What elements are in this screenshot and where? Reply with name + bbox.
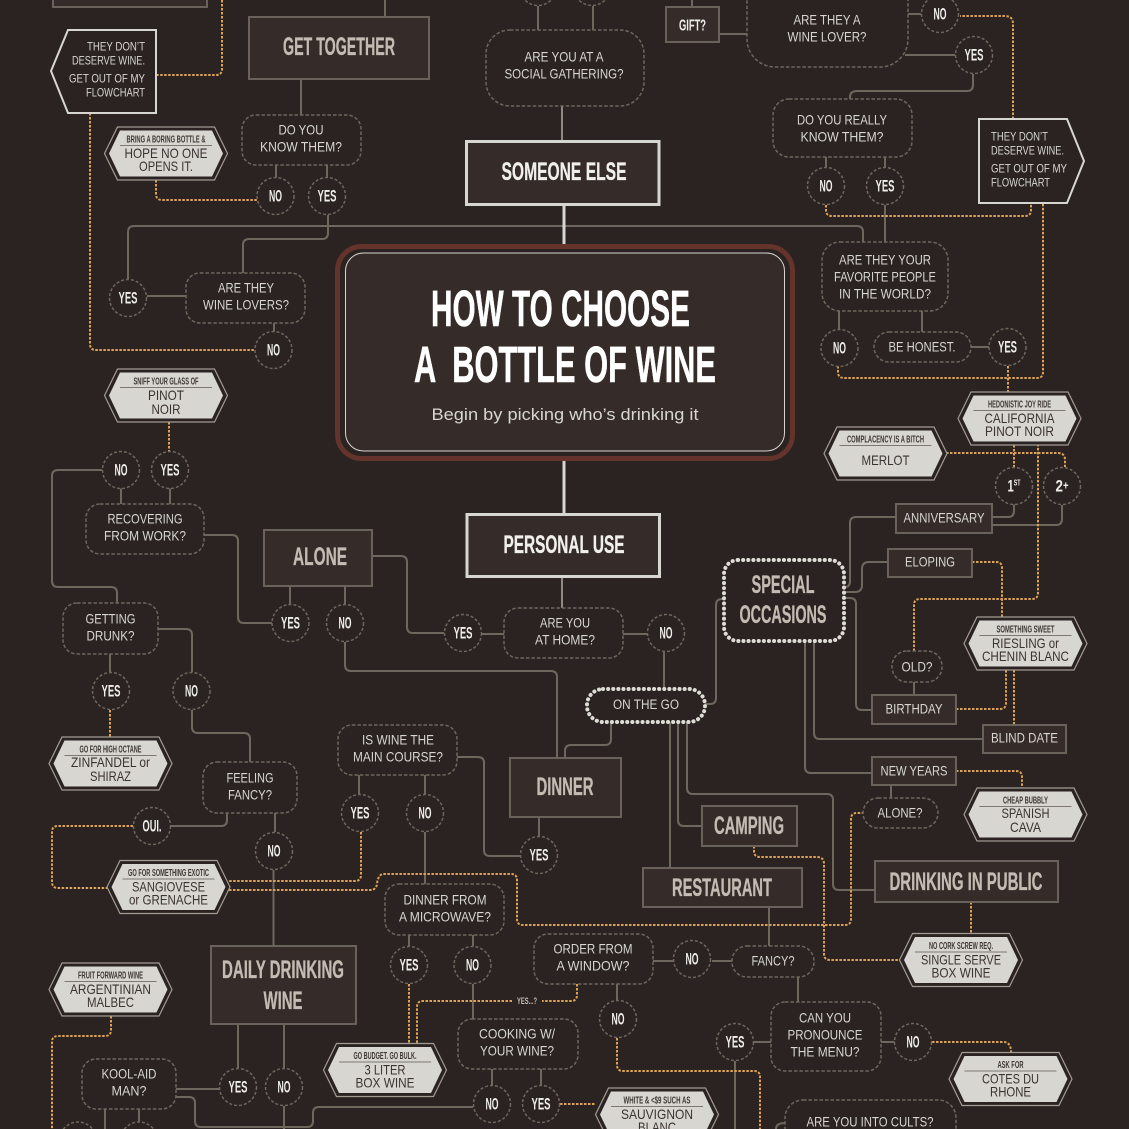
- question: are you at home: AT HOME?: [535, 632, 595, 648]
- title panel: [338, 246, 792, 458]
- category box: daily drinking wine: WINE: [264, 987, 302, 1015]
- answer: no: [600, 1000, 636, 1038]
- hub: special occasions: [724, 560, 844, 641]
- wine tag: zinfandel or shiraz: [49, 737, 172, 790]
- question: are they wine lovers: ARE THEY: [218, 280, 275, 296]
- answer: yes: [989, 328, 1026, 366]
- wine tag: sauvignon blanc: [596, 1088, 718, 1129]
- category box: alone: [264, 530, 372, 586]
- answer: no: NO: [820, 176, 832, 196]
- question: are they a wine lover: WINE LOVER?: [788, 28, 867, 44]
- question: are they your favorite people in the world: FAVORITE PEOPLE: [834, 268, 936, 284]
- answer: yes: [716, 1024, 754, 1060]
- occasion: eloping: [888, 549, 972, 577]
- wine tag: california pinot noir: [958, 392, 1081, 445]
- wine tag: cotes du rhone: ASK FOR: [998, 1059, 1024, 1071]
- answer: yes: YES: [530, 846, 548, 864]
- answer: no: NO: [686, 950, 698, 968]
- wine tag: riesling or chenin blanc: CHENIN BLANC: [982, 648, 1069, 664]
- question: dinner from a microwave: [385, 884, 504, 935]
- wine tag: zinfandel or shiraz: ZINFANDEL or: [71, 754, 150, 770]
- answer: two or more anniversaries: 2: [1056, 476, 1065, 496]
- answer: yes: [520, 836, 558, 874]
- wine tag: spanish cava: SPANISH: [1002, 805, 1050, 821]
- answer: yes: YES: [998, 338, 1017, 356]
- wine tag: spanish cava: [964, 788, 1087, 841]
- occasion: blind date: [983, 725, 1066, 753]
- answer: no: NO: [486, 1094, 498, 1114]
- answer: yes: [152, 452, 188, 488]
- wine tag: hope no one opens it: BRING A BORING BOTTLE &: [126, 134, 206, 146]
- answer: yes: YES: [318, 186, 336, 206]
- answer: two or more anniversaries: +: [1063, 478, 1068, 492]
- wine tag: 3 liter box wine: GO BUDGET. GO BULK.: [353, 1050, 417, 1062]
- answer: no: NO: [934, 4, 946, 24]
- answer: no: NO: [267, 340, 280, 360]
- wine tag: sauvignon blanc: WHITE & <$9 SUCH AS: [624, 1094, 690, 1106]
- question: are they a wine lover: [747, 0, 908, 67]
- wine tag: california pinot noir: HEDONISTIC JOY RIDE: [988, 398, 1051, 410]
- wine tag: cotes du rhone: [949, 1052, 1072, 1106]
- stop sign left: they don't deserve wine: DESERVE WINE.: [72, 56, 145, 68]
- wine tag: pinot noir: SNIFF YOUR GLASS OF: [134, 376, 199, 388]
- question: alone: ALONE?: [878, 804, 923, 820]
- answer: no: [922, 0, 958, 32]
- stop sign right: they don't deserve wine: THEY DON’T: [991, 132, 1048, 144]
- stop sign left: they don't deserve wine: THEY DON’T: [87, 42, 145, 54]
- stop sign left: they don't deserve wine: GET OUT OF MY: [69, 74, 145, 86]
- stop sign left: they don't deserve wine: FLOWCHART: [86, 88, 145, 100]
- category box: someone else: SOMEONE ELSE: [502, 158, 626, 186]
- stop sign right: they don't deserve wine: [979, 119, 1084, 203]
- answer: no: [266, 1068, 302, 1106]
- answer: no: [406, 794, 444, 832]
- answer: no: NO: [418, 804, 432, 822]
- question: are they your favorite people in the world: IN THE WORLD?: [839, 286, 931, 302]
- answer: no: NO: [268, 842, 280, 860]
- answer: oui: [134, 808, 170, 844]
- answer: two or more anniversaries: [1044, 468, 1080, 504]
- wine tag: hope no one opens it: HOPE NO ONE: [124, 145, 208, 161]
- wine tag: riesling or chenin blanc: SOMETHING SWEET: [996, 624, 1055, 636]
- category box: camping: [702, 806, 797, 846]
- wine tag: spanish cava: CAVA: [1010, 819, 1042, 835]
- hub: special occasions: OCCASIONS: [740, 601, 826, 629]
- answer: yes: YES: [160, 460, 180, 480]
- answer circle clipped at bottom: [120, 1122, 158, 1129]
- answer: yes: [342, 794, 378, 832]
- question: cooking with your wine: YOUR WINE?: [480, 1042, 554, 1058]
- question: kool-aid man: MAN?: [112, 1082, 147, 1098]
- wine tag: hope no one opens it: [104, 127, 228, 180]
- stop sign right: they don't deserve wine: DESERVE WINE.: [991, 146, 1064, 158]
- answer: yes: [866, 168, 904, 204]
- wine tag: spanish cava: CHEAP BUBBLY: [1003, 794, 1048, 806]
- category box: dinner: [510, 758, 621, 817]
- question: feeling fancy: [203, 762, 297, 813]
- question: order from a window: ORDER FROM: [554, 940, 632, 956]
- question: recovering from work: RECOVERING: [108, 510, 182, 526]
- question: order from a window: A WINDOW?: [556, 958, 630, 974]
- question: getting drunk: GETTING: [86, 610, 136, 626]
- answer circle clipped at bottom: [60, 1122, 96, 1129]
- wine tag: sangiovese or grenache: or GRENACHE: [129, 892, 208, 908]
- answer: yes: YES: [726, 1032, 744, 1052]
- question: do you really know them: KNOW THEM?: [800, 128, 884, 144]
- category box: daily drinking wine: [211, 946, 356, 1024]
- answer: yes: YES: [964, 46, 984, 64]
- answer: no: NO: [906, 1032, 920, 1052]
- answer: yes: [220, 1068, 256, 1106]
- answer: yes: YES: [281, 614, 300, 632]
- answer circle clipped at top: [520, 0, 556, 6]
- question: can you pronounce the menu: [771, 1002, 881, 1071]
- question: order from a window: [534, 934, 653, 984]
- answer: no: [326, 604, 364, 642]
- question: dinner from a microwave: DINNER FROM: [404, 892, 486, 908]
- answer: yes: [92, 672, 130, 710]
- answer: yes: [444, 614, 482, 652]
- occasion: new years: [872, 757, 956, 785]
- question: is wine the main course: [338, 725, 457, 775]
- answer: no: [256, 832, 292, 870]
- question: are they wine lovers: WINE LOVERS?: [203, 296, 289, 312]
- answer: no: NO: [338, 614, 352, 632]
- wine tag: california pinot noir: CALIFORNIA: [984, 410, 1055, 426]
- question: are you at a social gathering: ARE YOU AT A: [524, 48, 604, 64]
- wine tag: pinot noir: [104, 369, 228, 422]
- answer: yes: [272, 604, 309, 642]
- wine tag: sangiovese or grenache: [107, 860, 230, 914]
- question: are they your favorite people in the world: [822, 242, 948, 311]
- wine tag: pinot noir: NOIR: [152, 401, 180, 417]
- category box: get together: [249, 17, 429, 79]
- category box: daily drinking wine: DAILY DRINKING: [222, 956, 344, 984]
- question: do you really know them: [773, 99, 912, 157]
- answer: no: NO: [269, 186, 282, 206]
- top-left partial box: [53, 0, 207, 7]
- question: can you pronounce the menu: CAN YOU: [799, 1010, 851, 1026]
- question: kool-aid man: KOOL-AID: [102, 1066, 156, 1082]
- wine tag: single serve box wine: NO CORK SCREW REQ.: [929, 940, 993, 952]
- wine tag: riesling or chenin blanc: RIESLING or: [992, 635, 1059, 651]
- answer: no: NO: [833, 338, 846, 358]
- category box: dinner: DINNER: [536, 773, 594, 801]
- question: are you into cults: [785, 1100, 956, 1129]
- wine tag: california pinot noir: PINOT NOIR: [985, 423, 1054, 439]
- answer: yes: [522, 1086, 560, 1122]
- question: are you at home: ARE YOU: [540, 614, 590, 630]
- question: alone: [863, 798, 938, 828]
- answer: no: [648, 614, 684, 652]
- answer: no: NO: [114, 460, 128, 480]
- answer: yes: YES: [102, 682, 120, 700]
- question: be honest: BE HONEST.: [888, 338, 956, 354]
- wine tag: cotes du rhone: COTES DU: [982, 1070, 1039, 1086]
- question: recovering from work: FROM WORK?: [104, 528, 186, 544]
- question: do you know them: DO YOU: [278, 122, 324, 138]
- wine tag: riesling or chenin blanc: [964, 617, 1087, 670]
- wine tag: argentinian malbec: FRUIT FORWARD WINE: [78, 970, 143, 982]
- question: old: OLD?: [902, 658, 933, 674]
- question: feeling fancy: FEELING: [226, 770, 274, 786]
- question: is wine the main course: IS WINE THE: [362, 732, 434, 748]
- hub: on the go: ON THE GO: [613, 697, 679, 712]
- wine tag: merlot: [824, 427, 947, 480]
- occasion: birthday: [872, 695, 956, 724]
- answer: yes: YES: [454, 624, 472, 642]
- occasion: anniversary: ANNIVERSARY: [904, 510, 985, 526]
- occasion: eloping: ELOPING: [905, 554, 955, 570]
- question: is wine the main course: MAIN COURSE?: [353, 748, 443, 764]
- answer: yes: [110, 280, 146, 316]
- question: fancy: FANCY?: [752, 952, 795, 968]
- answer: no: [674, 940, 710, 978]
- answer: oui: OUI.: [142, 816, 162, 836]
- answer: no: NO: [660, 624, 672, 642]
- stop sign right: they don't deserve wine: FLOWCHART: [991, 178, 1050, 190]
- title text: [414, 280, 716, 393]
- answer: no: [255, 332, 292, 368]
- question: are they wine lovers: [186, 273, 305, 323]
- wine tag: hope no one opens it: OPENS IT.: [139, 158, 193, 174]
- occasion: blind date: BLIND DATE: [991, 730, 1058, 746]
- question box: gift: GIFT?: [679, 18, 706, 34]
- question: feeling fancy: FANCY?: [228, 786, 272, 802]
- question: getting drunk: [63, 603, 158, 654]
- question: can you pronounce the menu: THE MENU?: [790, 1044, 860, 1060]
- category box: personal use: [467, 514, 660, 576]
- wine tag: single serve box wine: SINGLE SERVE: [921, 952, 1001, 968]
- question: cooking with your wine: COOKING W/: [479, 1026, 555, 1042]
- question: old: [892, 651, 942, 682]
- question: are they your favorite people in the world: ARE THEY YOUR: [839, 252, 931, 268]
- category box: restaurant: RESTAURANT: [672, 874, 772, 902]
- category box: camping: CAMPING: [714, 812, 784, 840]
- question: recovering from work: [86, 504, 204, 554]
- question: cooking with your wine: [458, 1019, 578, 1069]
- question: are they a wine lover: ARE THEY A: [794, 12, 861, 28]
- category box: restaurant: [643, 868, 802, 907]
- answer: no: NO: [466, 956, 479, 974]
- category box: drinking in public: [875, 861, 1058, 902]
- answer: no: [454, 946, 491, 984]
- hub: special occasions: SPECIAL: [752, 571, 814, 599]
- answer: yes: [956, 36, 992, 74]
- wine tag: 3 liter box wine: 3 LITER: [364, 1062, 406, 1078]
- title text: A BOTTLE OF WINE: [414, 336, 716, 393]
- answer: yes: [390, 946, 428, 984]
- question box: gift: [666, 7, 719, 42]
- answer: first anniversary: ST: [1014, 478, 1021, 488]
- question: dinner from a microwave: A MICROWAVE?: [399, 908, 491, 924]
- wine tag: single serve box wine: [900, 934, 1022, 986]
- answer: no: [102, 452, 140, 488]
- wine tag: sangiovese or grenache: SANGIOVESE: [132, 878, 205, 894]
- title text: HOW TO CHOOSE: [431, 280, 690, 337]
- wine tag: cotes du rhone: RHONE: [990, 1084, 1031, 1100]
- question: can you pronounce the menu: PRONOUNCE: [788, 1026, 862, 1042]
- answer: no: NO: [185, 682, 198, 700]
- subtitle: Begin by picking who’s drinking it: [432, 405, 699, 424]
- question: do you know them: [242, 115, 361, 165]
- answer circle clipped at top: [574, 0, 610, 6]
- occasion: new years: NEW YEARS: [880, 762, 948, 778]
- answer: first anniversary: [996, 468, 1032, 504]
- answer: no: [173, 672, 210, 710]
- answer: first anniversary: 1: [1008, 476, 1017, 496]
- answer: no: [821, 330, 858, 366]
- answer: no: NO: [278, 1078, 290, 1096]
- answer: yes: YES: [532, 1094, 550, 1114]
- wine tag: single serve box wine: BOX WINE: [932, 964, 990, 980]
- wine tag: sauvignon blanc: SAUVIGNON: [621, 1106, 693, 1122]
- wine tag: 3 liter box wine: BOX WINE: [356, 1074, 414, 1090]
- wine tag: zinfandel or shiraz: GO FOR HIGH OCTANE: [80, 744, 142, 756]
- question: do you know them: KNOW THEM?: [260, 138, 342, 154]
- answer: yes: YES: [118, 288, 138, 308]
- answer: yes: YES: [876, 176, 894, 196]
- question: be honest: [874, 332, 971, 362]
- answer: yes: [308, 178, 346, 214]
- answer: yes: YES: [350, 804, 370, 822]
- answer: no: [474, 1086, 510, 1122]
- stop sign right: they don't deserve wine: GET OUT OF MY: [991, 164, 1067, 176]
- wine tag: merlot: MERLOT: [862, 452, 910, 468]
- wine tag: merlot: COMPLACENCY IS A BITCH: [847, 434, 924, 446]
- question: kool-aid man: [82, 1059, 176, 1109]
- wine tag: argentinian malbec: MALBEC: [87, 994, 134, 1010]
- category box: someone else: [466, 142, 659, 204]
- question: are you at a social gathering: SOCIAL GATHERING?: [504, 66, 624, 82]
- wine tag: argentinian malbec: ARGENTINIAN: [70, 981, 151, 997]
- category box: alone: ALONE: [293, 543, 347, 571]
- label: yes...?: YES...?: [517, 996, 537, 1007]
- category box: personal use: PERSONAL USE: [504, 531, 624, 559]
- occasion: anniversary: [896, 504, 992, 533]
- wine tag: zinfandel or shiraz: SHIRAZ: [90, 768, 131, 784]
- stop sign left: they don't deserve wine: [51, 30, 156, 113]
- question: fancy: [732, 946, 814, 977]
- answer: yes: YES: [400, 956, 418, 974]
- answer: yes: YES: [228, 1078, 248, 1096]
- category box: get together: GET TOGETHER: [283, 33, 395, 61]
- wine tag: sangiovese or grenache: GO FOR SOMETHING EXOTIC: [128, 867, 209, 879]
- wine tag: argentinian malbec: [49, 963, 172, 1016]
- answer: no: [894, 1024, 932, 1060]
- question: do you really know them: DO YOU REALLY: [797, 112, 888, 128]
- answer: no: [257, 178, 294, 214]
- question: are you at a social gathering: [486, 30, 644, 106]
- wine tag: pinot noir: PINOT: [148, 387, 184, 403]
- occasion: birthday: BIRTHDAY: [886, 700, 943, 716]
- wine tag: 3 liter box wine: [324, 1044, 446, 1096]
- hub: on the go: [587, 689, 705, 722]
- answer: no: [808, 168, 844, 204]
- question: getting drunk: DRUNK?: [86, 628, 135, 644]
- answer: no: NO: [612, 1010, 624, 1028]
- question: are you at home: [504, 608, 623, 658]
